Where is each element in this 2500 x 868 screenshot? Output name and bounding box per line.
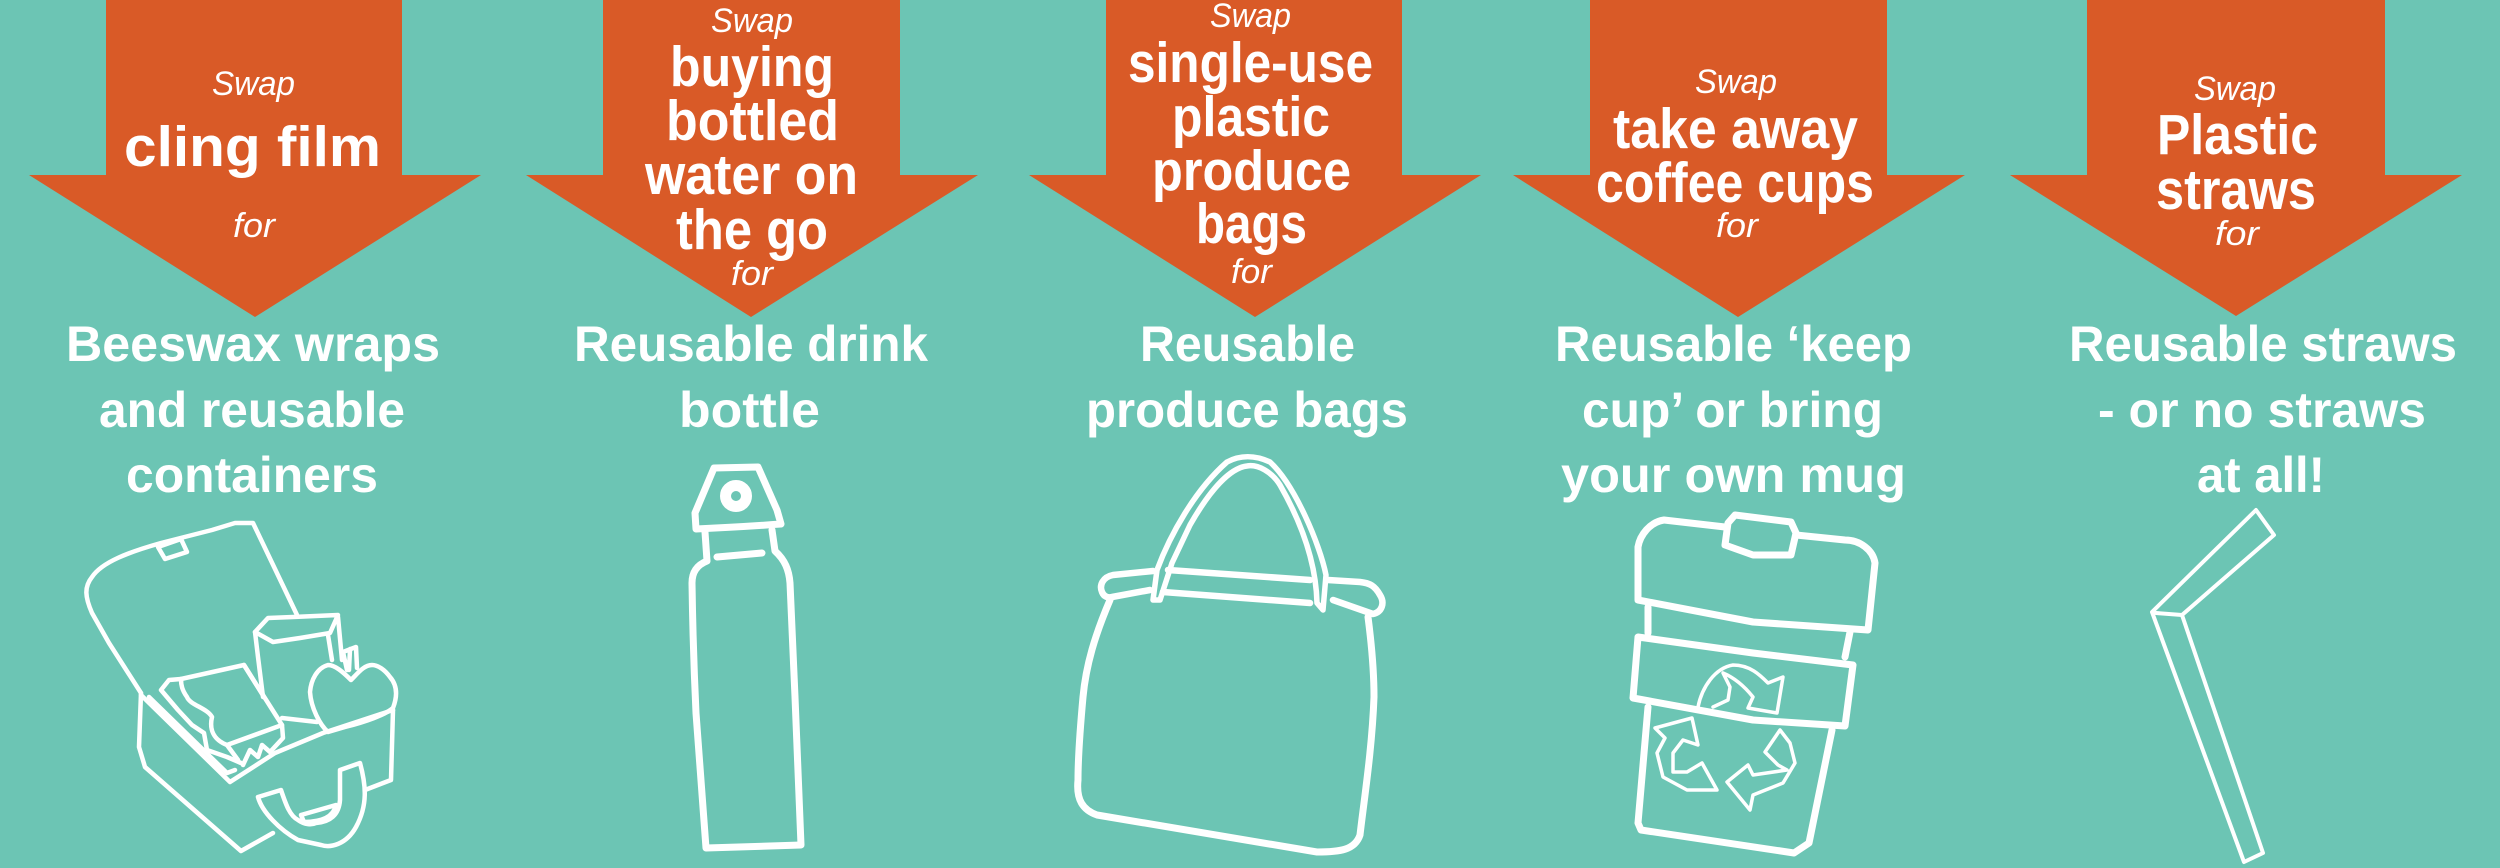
arrow: bottled water <box>526 0 978 317</box>
alternative text: reusable keep cup <box>1555 316 1912 503</box>
arrow: cling film <box>29 0 481 317</box>
arrow text: swap take away coffee cups: Swap <box>1695 63 1777 101</box>
icon: recycling arrows <box>1655 665 1795 810</box>
alternative text: reusable drink bottle: Reusable drink <box>574 316 928 372</box>
arrow text: swap single-use plastic produce bags: for <box>1231 253 1274 291</box>
arrow text: swap take away coffee cups: for <box>1716 207 1760 245</box>
arrow text: swap single-use plastic produce bags: single-use <box>1128 31 1373 95</box>
icon: bent straw <box>2152 510 2274 862</box>
arrow text: swap single-use plastic produce bags: produce <box>1152 139 1351 203</box>
alternative text: beeswax wraps: and reusable <box>99 382 405 438</box>
arrow text: swap single-use plastic produce bags: bags <box>1196 192 1307 256</box>
arrow text: swap take away coffee cups: coffee cups <box>1596 151 1874 215</box>
arrow text: swap buying bottled water <box>644 2 858 293</box>
arrow text: swap plastic straws <box>2156 70 2318 253</box>
arrow text: swap buying bottled water: the go <box>676 198 828 262</box>
arrow: coffee cups <box>1513 0 1965 317</box>
panel: plastic straws swap <box>2010 0 2462 862</box>
panel: coffee cups swap <box>1513 0 1965 853</box>
alternative text: beeswax wraps <box>66 316 440 503</box>
arrow text: swap plastic straws: for <box>2215 215 2261 253</box>
alternative text: reusable drink bottle: bottle <box>679 382 820 438</box>
alternative text: reusable produce bags: produce bags <box>1086 382 1408 438</box>
alternative text: reusable straws <box>2069 316 2457 503</box>
arrow text: swap buying bottled water: for <box>731 255 775 293</box>
panel: cling film swap <box>29 0 481 851</box>
panel: produce bags swap <box>1029 0 1481 852</box>
arrow text: swap buying bottled water: buying <box>670 35 834 99</box>
alternative text: reusable straws: at all! <box>2197 447 2325 503</box>
icon: reusable coffee cup <box>1633 515 1875 853</box>
arrow text: swap take away coffee cups <box>1596 63 1874 245</box>
arrow text: swap take away coffee cups: take away <box>1613 97 1858 161</box>
arrow text: swap buying bottled water: water on <box>644 143 858 207</box>
alternative text: reusable produce bags: Reusable <box>1140 316 1355 372</box>
arrow text: swap cling film for: for <box>233 207 277 245</box>
alternative text: beeswax wraps: containers <box>126 447 378 503</box>
arrow text: swap cling film for <box>124 65 381 245</box>
alternative text: reusable produce bags <box>1086 316 1408 438</box>
arrow text: swap buying bottled water: Swap <box>711 2 793 40</box>
arrow text: swap cling film for: cling film <box>124 115 381 179</box>
icon: drink bottle <box>692 467 801 848</box>
alternative text: reusable keep cup: Reusable ‘keep <box>1555 316 1912 372</box>
alternative text: reusable straws: Reusable straws <box>2069 316 2457 372</box>
icon: tote bag <box>1078 457 1382 852</box>
arrow text: swap single-use plastic produce bags: plastic <box>1172 85 1330 149</box>
arrow text: swap cling film for: Swap <box>212 65 295 103</box>
arrow: produce bags <box>1029 0 1481 317</box>
alternative text: reusable straws: - or no straws <box>2098 382 2426 438</box>
alternative text: reusable keep cup: cup’ or bring <box>1582 382 1883 438</box>
arrow text: swap plastic straws: straws <box>2156 158 2316 222</box>
alternative text: beeswax wraps: Beeswax wraps <box>66 316 440 372</box>
panel: bottled water swap <box>526 0 978 848</box>
icon: lunch box <box>86 523 396 851</box>
arrow text: swap single-use plastic produce bags <box>1128 0 1373 291</box>
alternative text: reusable keep cup: your own mug <box>1561 447 1906 503</box>
arrow text: swap buying bottled water: bottled <box>666 89 839 153</box>
arrow text: swap plastic straws: Plastic <box>2157 103 2318 167</box>
alternative text: reusable drink bottle <box>574 316 928 438</box>
arrow text: swap plastic straws: Swap <box>2194 70 2276 108</box>
arrow: plastic straws <box>2010 0 2462 316</box>
